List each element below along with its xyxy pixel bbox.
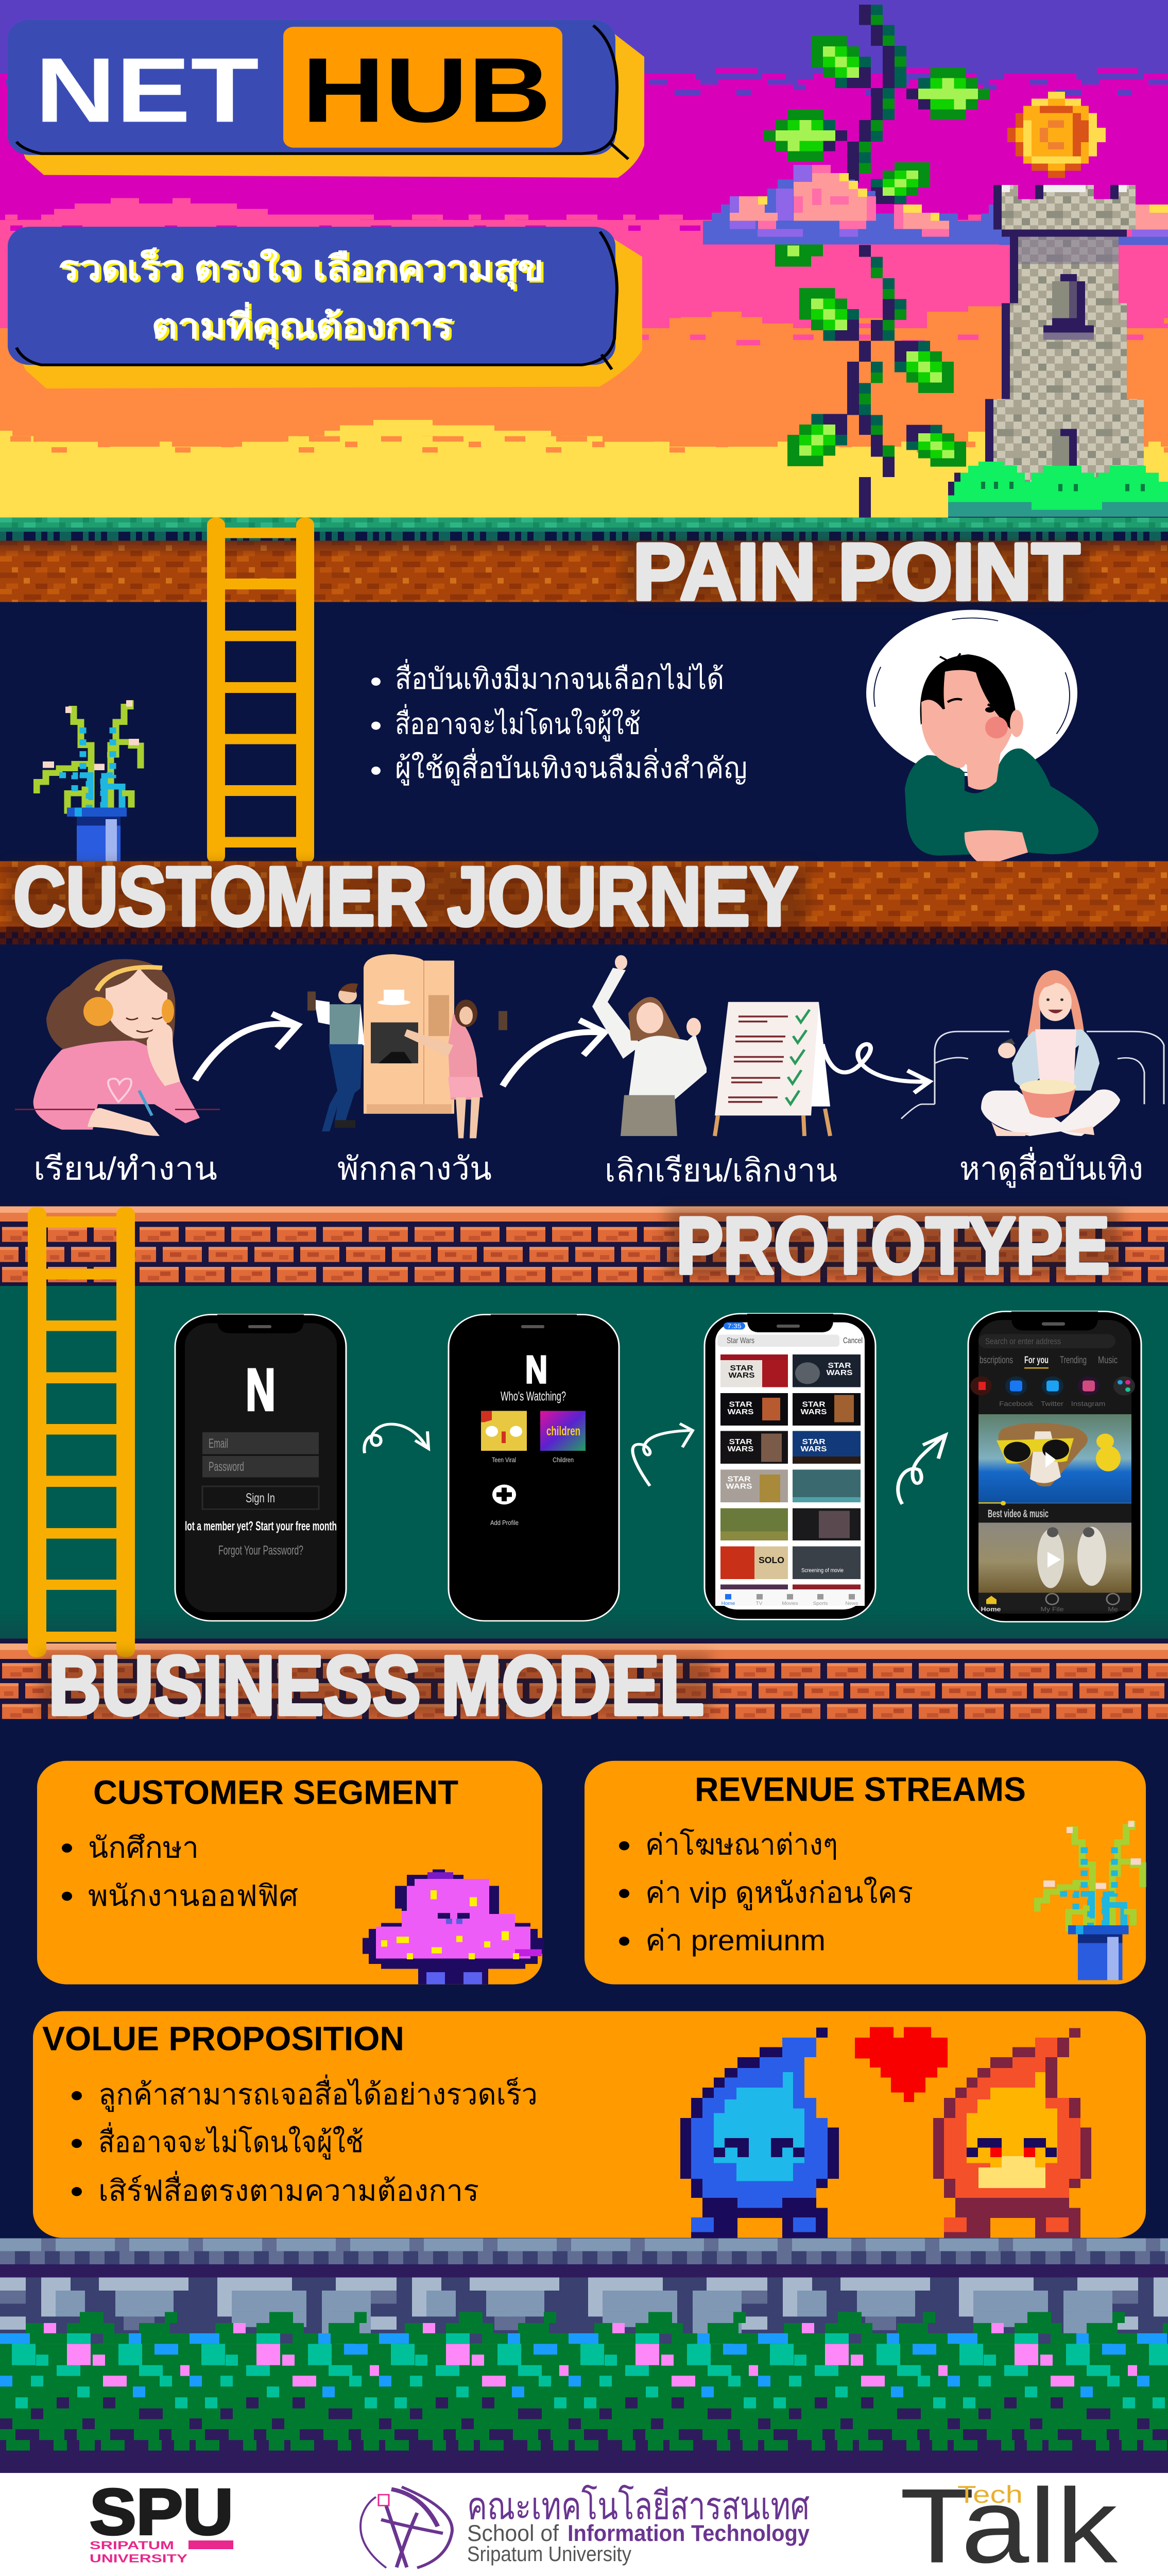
arrow: profiles to results (632, 1423, 693, 1486)
icon: heart (855, 2027, 948, 2102)
label: study or work: เรียน/ทำงาน (33, 1151, 217, 1187)
panel: business model background (0, 1719, 1168, 2239)
illustration: woman leaving work (592, 955, 830, 1136)
phone 3: search results: Movies (782, 1601, 798, 1606)
dog with sunglasses (997, 1423, 1121, 1486)
illustration: coffee machine break (307, 954, 507, 1138)
phone 4: video feed: Search or enter address (985, 1336, 1061, 1346)
icon: purple slime (363, 1870, 544, 1985)
heading: value proposition: VOLUE PROPOSITION (42, 2020, 404, 2058)
phone 4: video feed: bscriptions (980, 1354, 1013, 1366)
movie poster grid: WARS (728, 1408, 754, 1416)
phone 4: video feed (968, 1311, 1141, 1622)
background: sky and soil bands (0, 0, 1168, 519)
panel: prototype screens (0, 1286, 1168, 1644)
panel: customer segment (37, 1761, 544, 1985)
movie poster grid: STAR (729, 1400, 752, 1409)
phone 4: video feed: Best video & music (988, 1507, 1049, 1520)
phone 4: video feed: For you (1024, 1354, 1049, 1366)
bullet list: pain points: สื่ออาจจะไม่โดนใจผู้ใช้ (395, 704, 641, 741)
phone 2: profile picker: N (525, 1348, 547, 1391)
phone 4: video feed: Facebook (999, 1400, 1034, 1408)
icon: potted plant (37, 700, 141, 864)
tower outline (985, 185, 1119, 482)
phone 4: video feed: Trending (1060, 1354, 1087, 1366)
ladder 1 (207, 518, 314, 863)
movie poster grid: WARS (801, 1445, 827, 1453)
title badge: NET HUB (8, 20, 644, 178)
movie poster grid: WARS (827, 1368, 853, 1377)
phone 4: video feed: Instagram (1071, 1400, 1105, 1408)
phone 4: video feed: Home (981, 1605, 1001, 1613)
pain point soil band (0, 541, 1168, 603)
bullet list: segments: พนักงานออฟฟิศ (88, 1879, 298, 1912)
phone 4: video feed: My File (1040, 1605, 1064, 1613)
logo: SPU: UNIVERSITY (90, 2552, 187, 2565)
phone 3: search results (705, 1314, 875, 1619)
bullet list: value (72, 2074, 538, 2207)
bullet list: revenue: ค่า vip ดูหนังก่อนใคร (645, 1876, 913, 1910)
movie poster grid: Screening of movie (801, 1568, 844, 1573)
icon: water character (680, 2027, 839, 2238)
tagline line 2 top: ตามที่คุณต้องการ (151, 302, 453, 348)
movie poster grid: STAR (828, 1361, 851, 1370)
phone 2: profile picker (449, 1315, 619, 1621)
ladder 2 (28, 1207, 135, 1657)
icon: potted plant (1037, 1821, 1143, 1980)
movie poster grid: SOLO (759, 1555, 784, 1565)
leaf 2 (906, 67, 990, 120)
window (1052, 281, 1069, 318)
phone 4: video feed: Me (1108, 1605, 1118, 1613)
phone 1: login screen: Forgot Your Password? (218, 1543, 303, 1557)
coin (1007, 92, 1106, 178)
panel: pain point (0, 602, 1168, 864)
label: after school or work: เลิกเรียน/เลิกงาน (605, 1153, 837, 1188)
tagline line 1: รวดเร็ว ตรงใจ เลือกความสุข (61, 249, 546, 292)
arrow 3 (822, 1044, 930, 1093)
brick band: prototype (0, 1207, 1168, 1286)
leaf 4 (871, 162, 930, 204)
phone 3: search results: Sports (813, 1601, 828, 1606)
logo: school of information technology: School of (467, 2520, 559, 2546)
phone 3: search results: 7:35 (727, 1323, 742, 1330)
logo: SPU: SPU (90, 2476, 233, 2548)
movie poster grid: STAR (802, 1400, 825, 1409)
green bushes (948, 462, 1168, 520)
phone 4: video feed: Music (1098, 1354, 1118, 1366)
orange logo box (283, 27, 562, 148)
tab bar (715, 1589, 865, 1606)
phone 2: profile picker: Who's Watching? (501, 1389, 566, 1403)
footer (0, 2466, 1168, 2576)
phone 3: search results: News (846, 1601, 858, 1606)
arrow: login to profiles (364, 1424, 428, 1453)
bullet list: pain points (371, 659, 747, 786)
phone 3: search results: TV (756, 1601, 763, 1606)
phone 3: search results: Cancel (843, 1336, 863, 1345)
movie poster grid (720, 1354, 861, 1589)
phone 3: search results: Star Wars (727, 1336, 754, 1345)
tower stone (993, 185, 1144, 482)
logo: TechTalk: Tech (957, 2481, 1023, 2508)
bullet list: pain points: ผู้ใช้ดูสื่อบันเทิงจนลืมสิ่งสำคัญ (395, 748, 747, 786)
panel: value proposition (33, 2011, 1146, 2238)
crest (360, 2487, 452, 2568)
leaf 6 (799, 288, 859, 341)
word NET: NET (35, 39, 259, 142)
icon: fire character (933, 2028, 1091, 2238)
phone 1: login screen: lot a member yet? Start your free month (185, 1519, 337, 1533)
heading: revenue streams: REVENUE STREAMS (695, 1770, 1026, 1808)
phone 1: login screen: Password (209, 1460, 244, 1474)
bullet list: value: ลูกค้าสามารถเจอสื่อได้อย่างรวดเร็ว (98, 2074, 538, 2112)
movie poster grid: STAR (802, 1437, 825, 1446)
movie poster grid: STAR (729, 1437, 752, 1446)
brick band: business model (0, 1638, 1168, 1720)
phone 2: profile picker: Children (553, 1456, 574, 1464)
bullet list: revenue: ค่าโฆษณาต่างๆ (645, 1828, 838, 1861)
bullet list: value: เสิร์ฟสื่อตรงตามความต้องการ (98, 2171, 479, 2207)
bullet list: pain points: สื่อบันเทิงมีมากจนเลือกไม่ได้ (395, 659, 724, 695)
label: find entertainment: หาดูสื่อบันเทิง (959, 1147, 1143, 1188)
movie poster grid: WARS (726, 1482, 752, 1490)
word HUB: HUB (302, 39, 551, 142)
logo: school of information technology (360, 2484, 810, 2568)
movie poster grid: STAR (730, 1364, 753, 1372)
logo: SPU: SRIPATUM (90, 2539, 174, 2552)
penguins (1037, 1527, 1106, 1588)
leaf 5 under cloud (775, 245, 823, 267)
phone 1: login screen: N (246, 1357, 276, 1422)
top grass strip (0, 518, 1168, 541)
vine (764, 5, 990, 541)
heading: business model: BUSINESS MODEL (48, 1638, 704, 1732)
illustration: girl studying (15, 959, 220, 1136)
leaf 9 (906, 425, 966, 467)
tagline line 1 top: รวดเร็ว ตรงใจ เลือกความสุข (58, 247, 544, 290)
movie poster grid: WARS (728, 1445, 754, 1453)
leaf 7 (895, 341, 954, 393)
arrow: results to feed (898, 1435, 946, 1504)
stone wall and pixel grass (0, 2239, 1168, 2473)
panel: revenue streams (585, 1761, 1146, 1985)
pixel cloud (703, 165, 1168, 245)
bullet list: value: สื่ออาจจะไม่โดนใจผู้ใช้ (98, 2122, 364, 2160)
social icons (970, 1377, 1135, 1396)
heading: pain point: PAIN POINT (633, 527, 1080, 617)
logo: school of information technology: Information Technology (568, 2520, 810, 2546)
logo: school of information technology: คณะเทคโนโลยีสารสนเทศ (467, 2484, 810, 2528)
panel: customer journey (0, 944, 1168, 1207)
castle tower (985, 185, 1144, 482)
movie poster grid: WARS (801, 1408, 827, 1416)
tagline badge (8, 227, 642, 388)
leaf 8 (787, 414, 847, 466)
leaf 1 (811, 36, 871, 88)
logo: school of information technology: Sripatum University (467, 2543, 631, 2566)
bullet list: segments: นักศึกษา (88, 1831, 199, 1864)
phone 1: login screen (175, 1315, 346, 1621)
phone 4: video feed: Twitter (1041, 1400, 1063, 1408)
phone 2: profile picker: Add Profile (490, 1519, 519, 1527)
heading: customer journey: CUSTOMER JOURNEY (13, 850, 798, 943)
phone 1: login screen: Email (209, 1436, 228, 1451)
checklist board (715, 1002, 819, 1115)
bullet list: revenue: ค่า premiunm (645, 1924, 826, 1957)
leaf 3 (764, 110, 847, 162)
heading soil band: customer journey (0, 861, 1168, 945)
heading: customer segment: CUSTOMER SEGMENT (93, 1773, 458, 1811)
tagline line 2: ตามที่คุณต้องการ (154, 304, 455, 349)
leaf 5 highlight (787, 245, 799, 256)
phone 3: search results: Home (722, 1601, 735, 1606)
door (1052, 436, 1069, 482)
label: midday break: พักกลางวัน (337, 1151, 492, 1187)
phone 2: profile picker: Teen Viral (492, 1456, 516, 1464)
arrow 1 (195, 1014, 298, 1080)
arrow 2 (503, 1020, 605, 1086)
bullet list: revenue (619, 1828, 913, 1957)
movie poster grid: STAR (728, 1475, 750, 1483)
bullet list: segments (62, 1831, 298, 1912)
phone 2: profile picker: children (546, 1424, 580, 1438)
movie poster grid: WARS (729, 1371, 755, 1380)
illustration: woman on sofa with popcorn (901, 970, 1164, 1136)
illustration: tired person (863, 608, 1098, 867)
phone 1: login screen: Sign In (246, 1490, 275, 1505)
